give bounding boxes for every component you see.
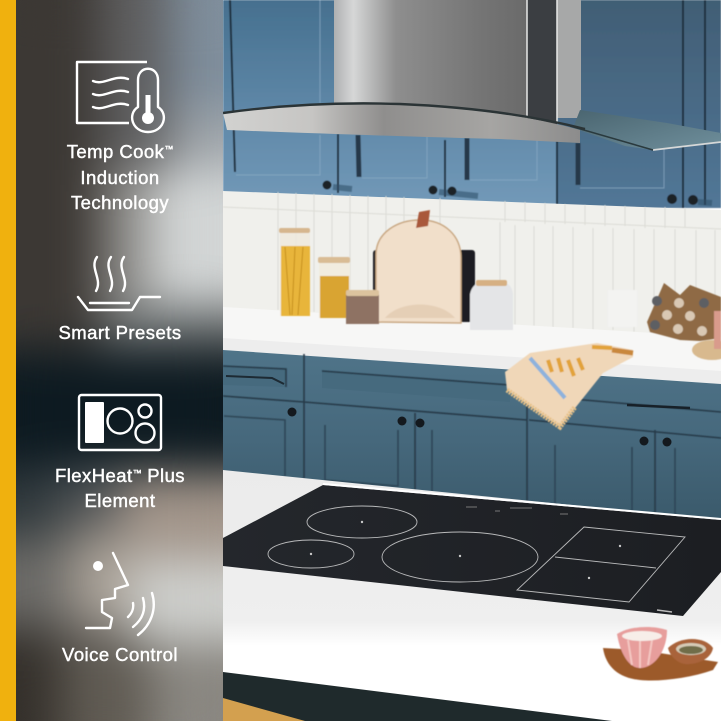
icon: cooktop layout (79, 395, 161, 450)
label: Smart Presets (58, 322, 182, 343)
drawer recess (322, 371, 510, 402)
feature: Smart Presets (58, 257, 182, 343)
feature: Voice Control (62, 553, 178, 665)
photo: kitchen scene (223, 0, 721, 721)
label: Plus (142, 465, 185, 486)
counter top (223, 307, 721, 371)
cabinet knobs (322, 180, 698, 205)
dish towel (505, 343, 633, 427)
icon: waves and thermometer (77, 62, 164, 132)
island counter (223, 470, 721, 632)
hood canopy (223, 104, 580, 143)
range hood (223, 0, 721, 150)
label: Temp Cook (67, 141, 164, 162)
label: Voice Control (62, 644, 178, 665)
jars and board on counter (279, 210, 637, 330)
flex zone (517, 527, 685, 602)
yellow accent bar (0, 0, 16, 721)
sidebar: blurred panel (16, 0, 223, 721)
wooden tray with bowls (603, 627, 718, 681)
backsplash (223, 191, 721, 340)
knob shadows (333, 187, 712, 203)
feature: Temp Cook Induction Technology (67, 62, 173, 213)
feature: Temp Cook Induction Technology: Technology (71, 192, 169, 213)
hood glass visor (573, 110, 721, 150)
burner rings (307, 506, 417, 538)
lower knobs (288, 408, 672, 446)
induction cooktop (223, 484, 721, 616)
lower cabinets (223, 350, 721, 530)
label: FlexHeat (55, 465, 133, 486)
label: ™ (133, 468, 142, 478)
island base and floor (223, 672, 612, 721)
feature: FlexHeat Plus Element: Element (84, 490, 156, 511)
upper cabinets (223, 0, 721, 208)
icon: steaming pan (78, 257, 160, 310)
label: ™ (164, 144, 173, 154)
icon: speaking head (86, 553, 154, 635)
spice rack (647, 283, 721, 360)
feature: FlexHeat Plus Element (55, 395, 185, 511)
feature: Temp Cook Induction Technology: Induction (80, 167, 160, 188)
